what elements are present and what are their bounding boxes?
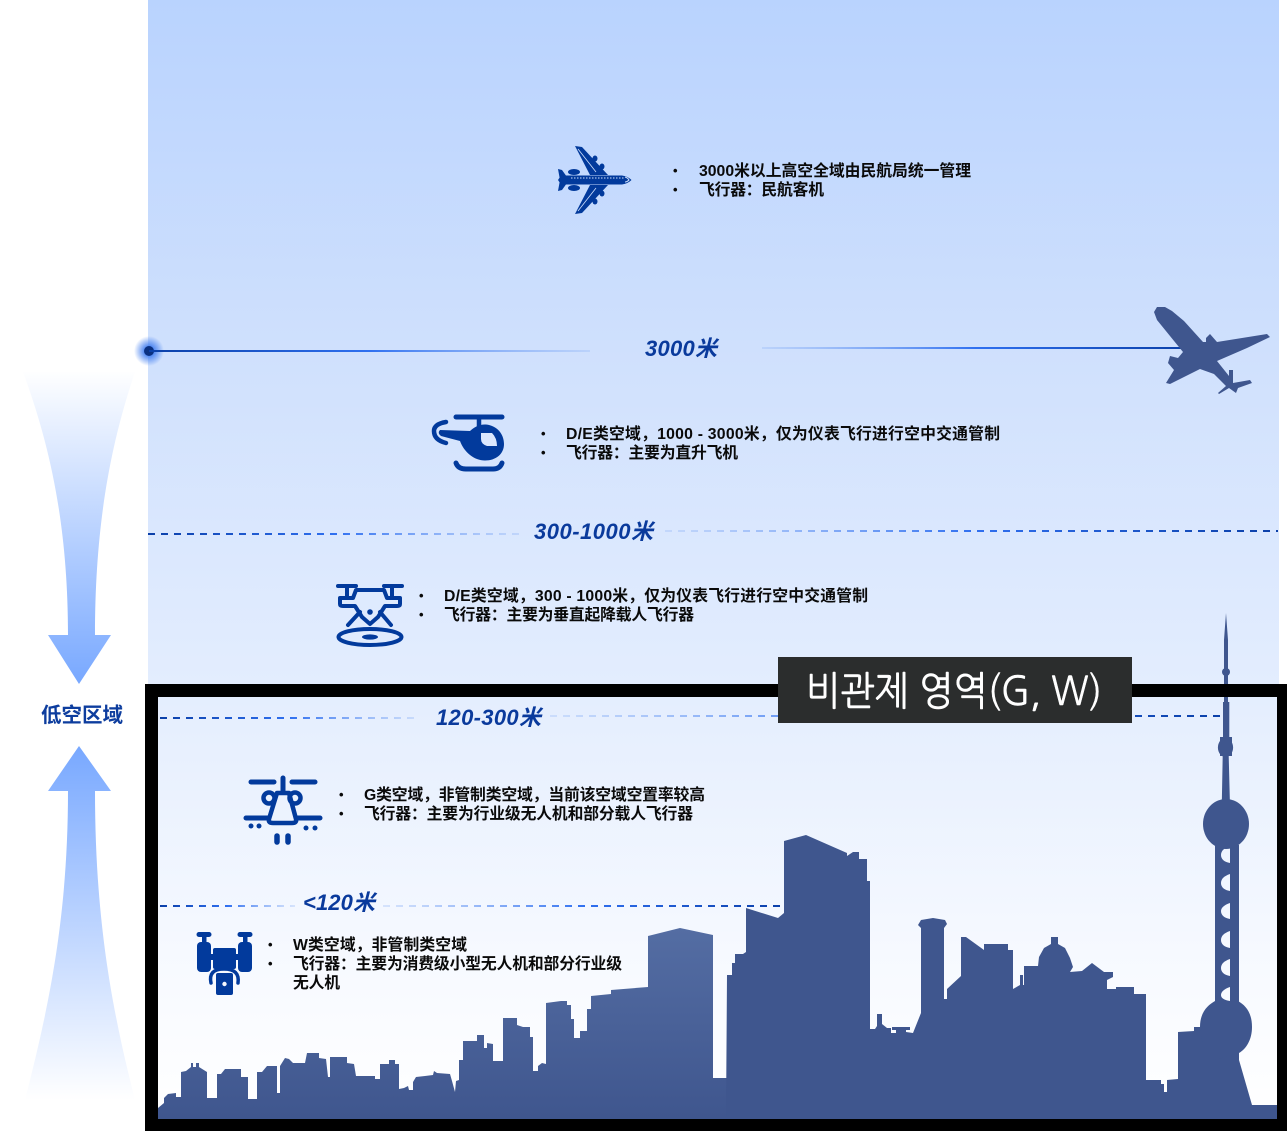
label box: uncontrolled airspace: 비관제 영역(G, W): [806, 671, 1102, 711]
text: VTOL airspace: 飞行器：主要为垂直起降载人飞行器: [444, 605, 694, 624]
heading: under 120m: <120米: [303, 890, 378, 915]
text: VTOL airspace: D/E类空域，300 - 1000米，仅为仪表飞行进行空中交通管制: [444, 586, 868, 605]
line: 3000m left: [149, 350, 590, 352]
label: low-altitude zone: 低空区域: [41, 703, 123, 727]
skyline: right high-rise city with tower: [726, 613, 1277, 1119]
text: W class airspace: [268, 935, 622, 992]
text: W class airspace: •: [268, 937, 273, 952]
line: under 120m right: [383, 905, 786, 907]
icon: VTOL drone with landing pad: [338, 586, 402, 645]
text: W class airspace: •: [268, 956, 273, 971]
text: W class airspace: 无人机: [293, 974, 340, 992]
line: under 120m left: [160, 905, 295, 907]
line: 120-300m left: [160, 717, 420, 719]
frame: uncontrolled airspace border: [145, 684, 1287, 1131]
text: airliner airspace: 飞行器：民航客机: [699, 180, 824, 199]
arrow: downward to low-altitude zone: [23, 372, 135, 684]
line: 3000m right: [762, 347, 1190, 349]
text: G class airspace: 飞行器：主要为行业级无人机和部分载人飞行器: [364, 804, 693, 823]
text: VTOL airspace: •: [419, 607, 424, 622]
skyline: left low-rise city: [158, 928, 728, 1119]
text: helicopter airspace: D/E类空域，1000 - 3000米，仅为仪表飞行进行空中交通管制: [566, 424, 1000, 443]
icon: industrial drone: [246, 778, 320, 842]
text: helicopter airspace: 飞行器：主要为直升飞机: [566, 443, 738, 462]
text: W class airspace: W类空域，非管制类空域: [293, 935, 467, 954]
icon: airliner silhouette climbing: [1154, 307, 1270, 394]
text: airliner airspace: •: [673, 182, 678, 197]
text: G class airspace: •: [339, 806, 344, 821]
text: helicopter airspace: •: [541, 445, 546, 460]
text: W class airspace: 飞行器：主要为消费级小型无人机和部分行业级: [293, 954, 622, 973]
line: 300-1000m left: [148, 533, 525, 535]
heading: 3000m: 3000米: [645, 336, 720, 361]
text: G class airspace: G类空域，非管制类空域，当前该空域空置率较高: [364, 785, 705, 804]
line: 300-1000m right: [665, 530, 1278, 532]
text: VTOL airspace: •: [419, 588, 424, 603]
label box: uncontrolled airspace: [778, 657, 1132, 723]
arrow: upward to low-altitude zone: [25, 746, 135, 1100]
text: helicopter airspace: •: [541, 426, 546, 441]
text: airliner airspace: 3000米以上高空全域由民航局统一管理: [699, 161, 971, 180]
icon: helicopter: [434, 417, 504, 469]
heading: 120-300m: 120-300米: [436, 705, 544, 730]
text: VTOL airspace: [419, 586, 868, 624]
marker: 3000m glowing dot: [134, 336, 164, 366]
icon: airliner top view: [558, 146, 632, 214]
text: G class airspace: [339, 785, 705, 823]
text: G class airspace: •: [339, 787, 344, 802]
heading: 300-1000m: 300-1000米: [534, 519, 656, 544]
icon: consumer drone: [197, 934, 252, 995]
line: 120-300m right: [550, 715, 1224, 717]
text: airliner airspace: [673, 161, 971, 199]
text: helicopter airspace: [541, 424, 1000, 462]
text: airliner airspace: •: [673, 163, 678, 178]
